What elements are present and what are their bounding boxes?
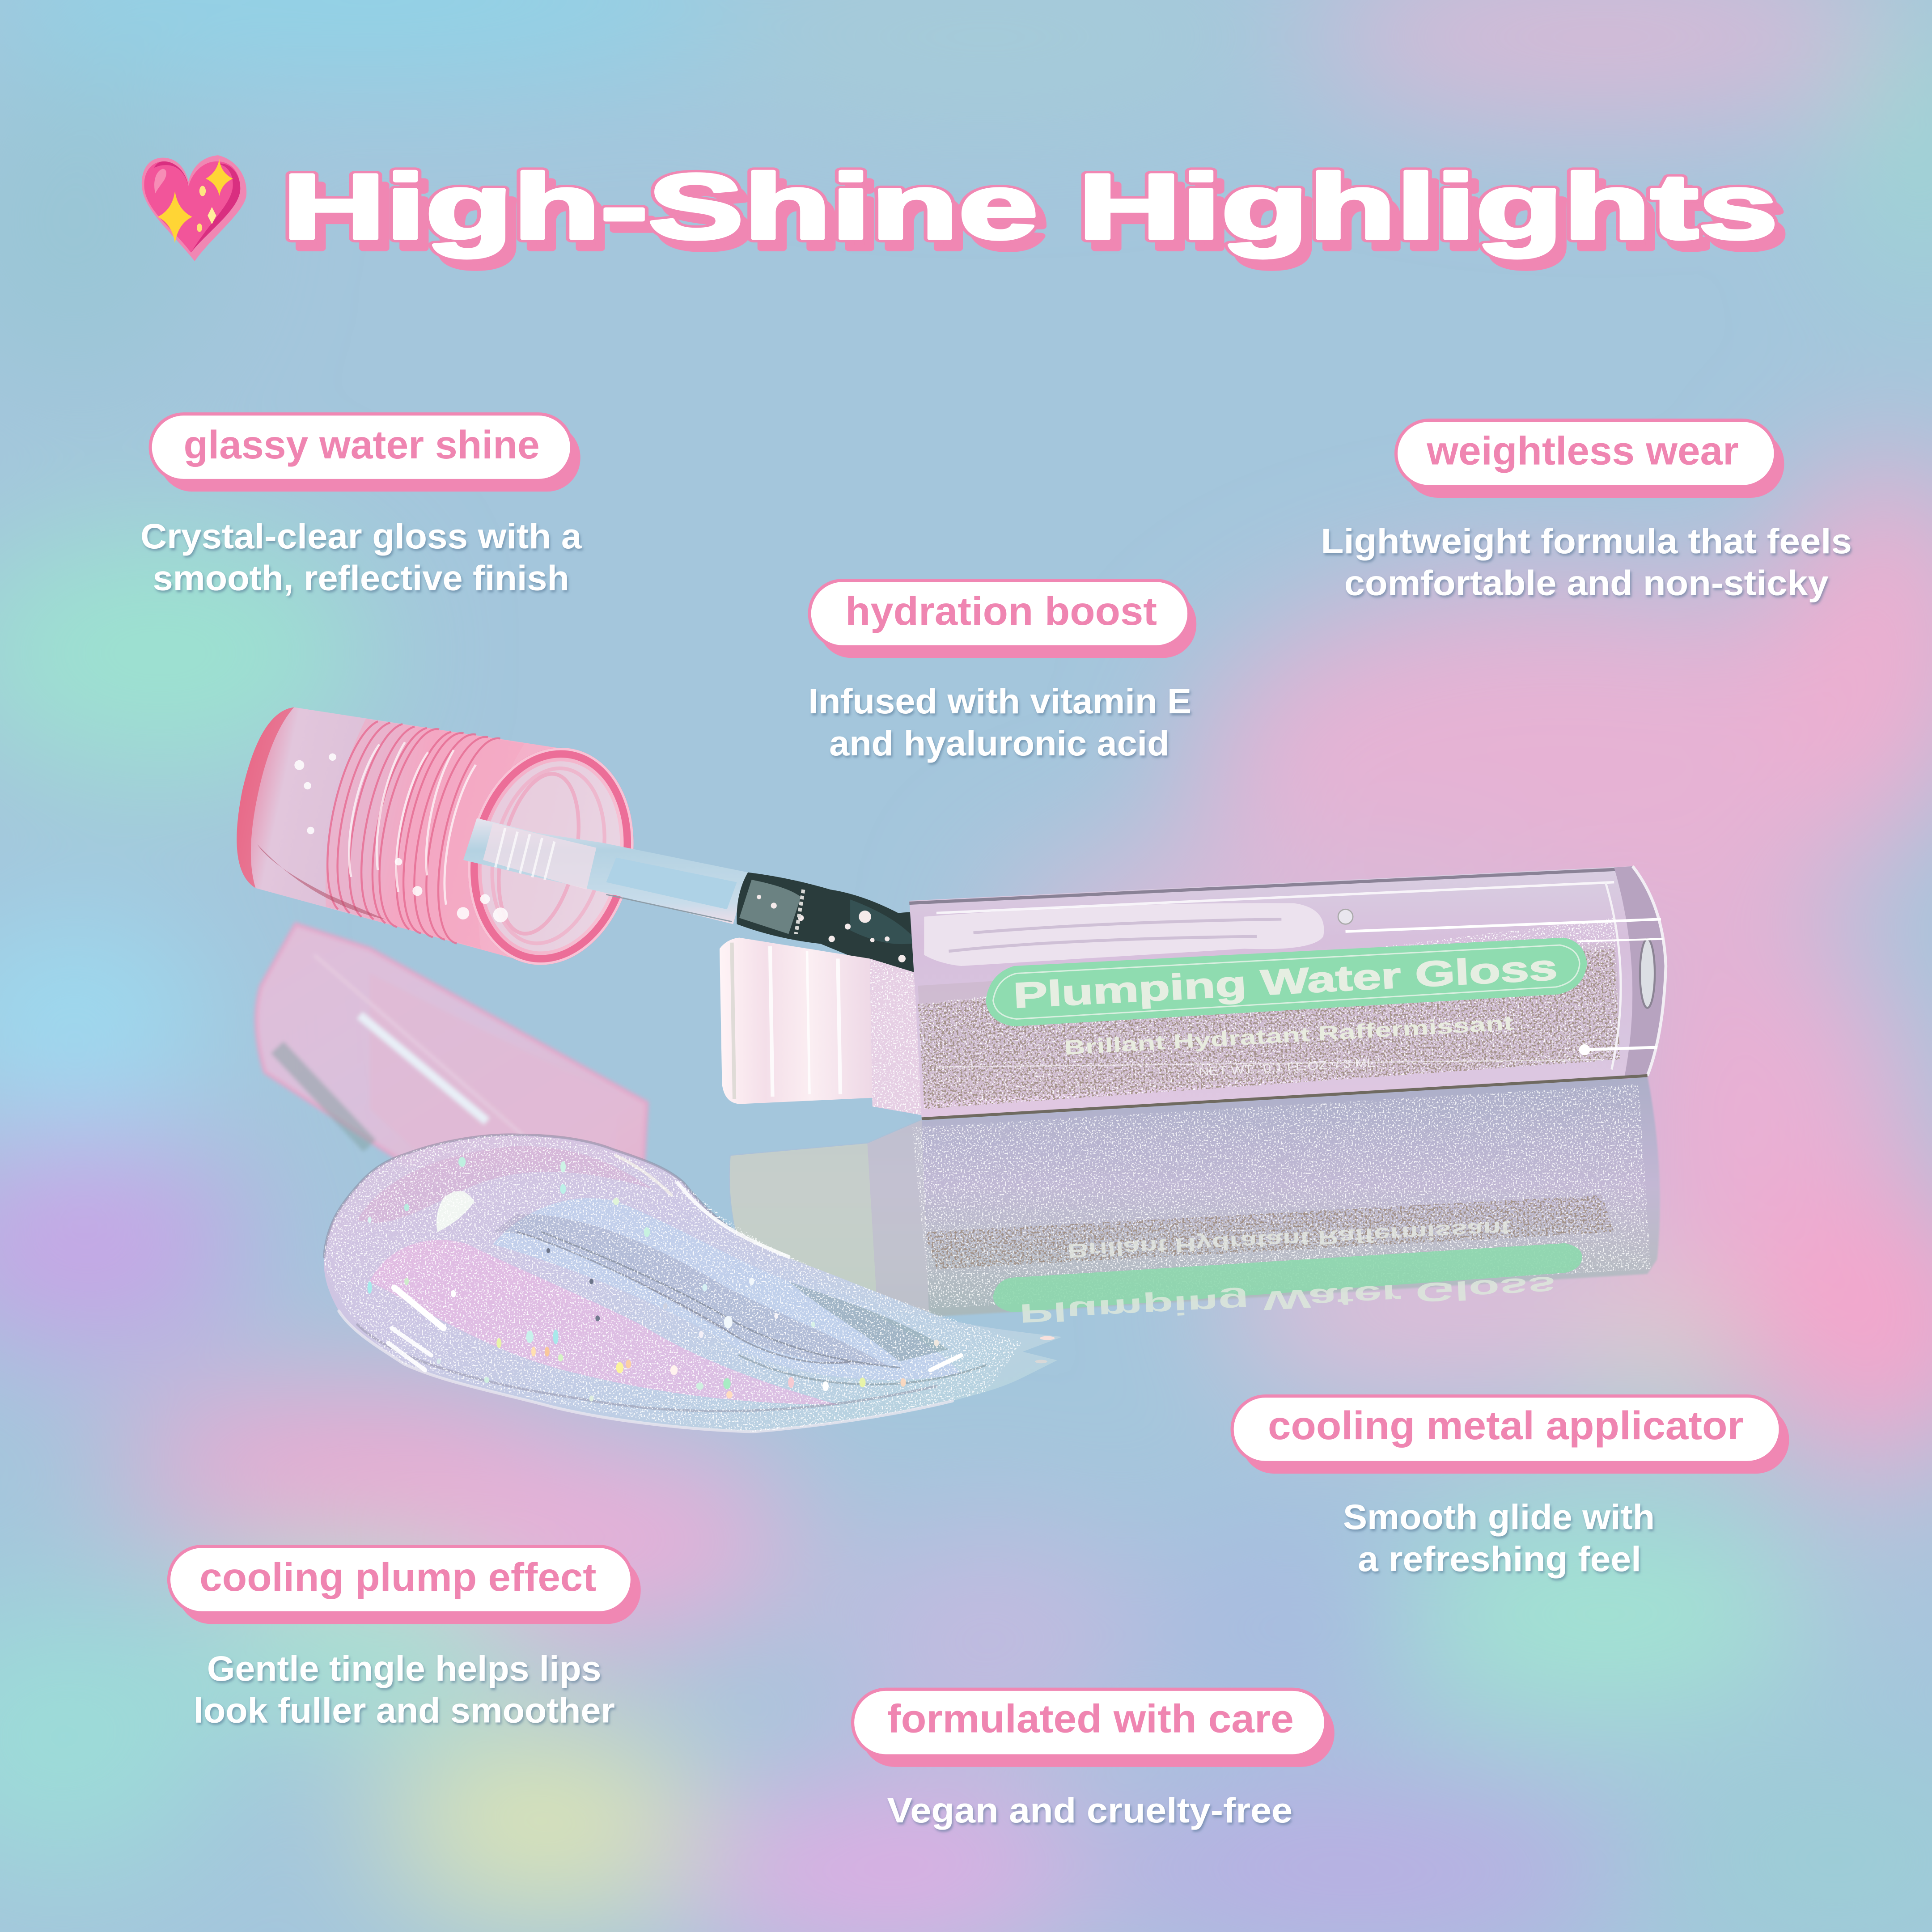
- tube small print: Brillant Hydratant Raffermissant: [1063, 1011, 1514, 1059]
- description: comfortable and non-sticky: [1344, 564, 1829, 603]
- description: a refreshing feel: [1358, 1539, 1641, 1579]
- green label: Plumping Water Gloss: [1013, 947, 1558, 1016]
- pill label: [1396, 420, 1784, 498]
- description: Lightweight formula that feels: [1321, 521, 1852, 561]
- description: Vegan and cruelty-free: [887, 1791, 1292, 1830]
- base end: [1614, 866, 1666, 1079]
- iridescent glitter flakes: [368, 1157, 1055, 1402]
- body: [909, 866, 1666, 1120]
- description: and hyaluronic acid: [829, 724, 1169, 763]
- brush tip: [737, 873, 959, 979]
- tube small print: NET WT.: 0.1 FL.OZ. / 3 ML: [1198, 1056, 1375, 1078]
- gloss tube: [720, 866, 1666, 1120]
- pill label: weightless wear: [1426, 428, 1738, 473]
- pill label: [150, 414, 580, 491]
- callout: weightless wear: [1321, 420, 1852, 603]
- pill label: [169, 1546, 641, 1624]
- pill label: hydration boost: [845, 589, 1157, 633]
- title: High-Shine Highlights: [291, 165, 1787, 268]
- tube small print: [1063, 1011, 1514, 1078]
- title: High-Shine Highlights: [282, 155, 1778, 258]
- icon: sparkling heart: [142, 155, 246, 261]
- pill label: formulated with care: [887, 1696, 1294, 1741]
- gloss cap: [220, 685, 652, 979]
- applicator wand: [463, 818, 959, 979]
- callout: cooling metal applicator: [1232, 1396, 1789, 1579]
- green label: [986, 938, 1587, 1026]
- reflection: cap: [256, 924, 647, 1165]
- pill label: cooling metal applicator: [1268, 1403, 1743, 1448]
- description: Gentle tingle helps lips: [207, 1649, 601, 1688]
- air bubble wave: [924, 903, 1324, 966]
- gloss swatch: [324, 1135, 1062, 1432]
- description: look fuller and smoother: [194, 1691, 615, 1730]
- stem: [463, 818, 748, 924]
- description: [1343, 1497, 1655, 1579]
- callout: hydration boost: [808, 580, 1196, 763]
- pill label: cooling plump effect: [199, 1555, 596, 1599]
- pill label: [853, 1689, 1335, 1767]
- title: [282, 155, 1787, 268]
- pill label: [809, 580, 1196, 658]
- description: Smooth glide with: [1343, 1497, 1655, 1537]
- reflected label: [993, 1217, 1582, 1328]
- description: [808, 682, 1191, 763]
- collar: [870, 958, 922, 1115]
- pill label: glassy water shine: [184, 422, 540, 467]
- reflected label: Plumping Water Gloss: [1018, 1271, 1556, 1328]
- description: Infused with vitamin E: [808, 682, 1191, 721]
- title: High-Shine Highlights: [282, 155, 1778, 258]
- threaded neck: [720, 938, 873, 1104]
- top glass edge: [909, 869, 1633, 903]
- callout: formulated with care: [853, 1689, 1335, 1830]
- bottom dark edge: [922, 1076, 1648, 1119]
- description: smooth, reflective finish: [153, 559, 569, 598]
- description: Crystal-clear gloss with a: [140, 517, 582, 556]
- description: [1321, 521, 1852, 603]
- description: [140, 517, 582, 598]
- reflected label: Brillant Hydratant Raffermissant: [1067, 1217, 1511, 1262]
- pill label: [1232, 1396, 1789, 1474]
- glare lines: [936, 919, 1663, 1067]
- callout: glassy water shine: [140, 414, 582, 598]
- description: [194, 1649, 615, 1730]
- callout: cooling plump effect: [169, 1546, 641, 1730]
- reflection: bottle: [730, 1076, 1660, 1328]
